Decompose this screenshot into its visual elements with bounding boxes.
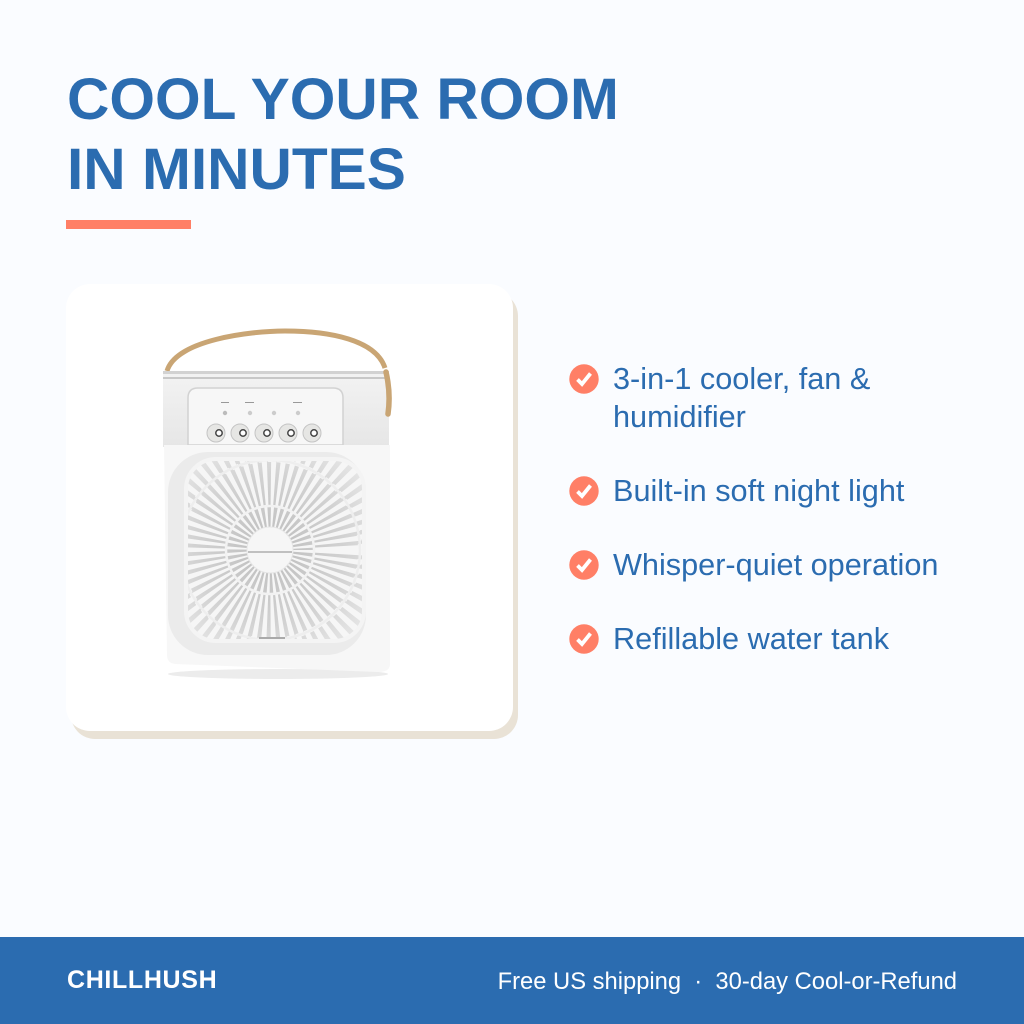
- handle: [167, 331, 385, 371]
- brand name: CHILLHUSH: [67, 966, 217, 994]
- bullet 1: [569, 362, 870, 434]
- icon: check: [569, 624, 599, 654]
- bullet 1: humidifier: [613, 400, 746, 434]
- title: [67, 67, 619, 202]
- bullet 3: Whisper-quiet operation: [613, 548, 938, 582]
- knobs: [207, 424, 321, 442]
- indicator dots: [221, 402, 302, 415]
- fan hub: [247, 527, 293, 573]
- panel: product card: [66, 284, 513, 731]
- grille latch: [259, 637, 285, 639]
- title: COOL YOUR ROOM: [67, 67, 619, 132]
- handle strap right: [386, 372, 389, 414]
- bullet 4: Refillable water tank: [613, 622, 889, 656]
- control panel: [188, 388, 343, 445]
- fan grille: [188, 461, 362, 639]
- base shadow: [168, 669, 388, 679]
- icon: check: [569, 476, 599, 506]
- fan recess: [168, 452, 366, 655]
- footer offer text: Free US shipping · 30-day Cool-or-Refund: [498, 968, 957, 995]
- icon: check: [569, 364, 599, 394]
- product image: cooler fan: [163, 328, 392, 679]
- body: [164, 445, 390, 672]
- title accent bar: [66, 220, 191, 229]
- footer bar: [0, 937, 1024, 1024]
- bullet 1: 3-in-1 cooler, fan &: [613, 362, 870, 396]
- icon: check: [569, 550, 599, 580]
- bullet 2: Built-in soft night light: [613, 474, 904, 508]
- water tank: [163, 371, 389, 447]
- title: IN MINUTES: [67, 137, 406, 202]
